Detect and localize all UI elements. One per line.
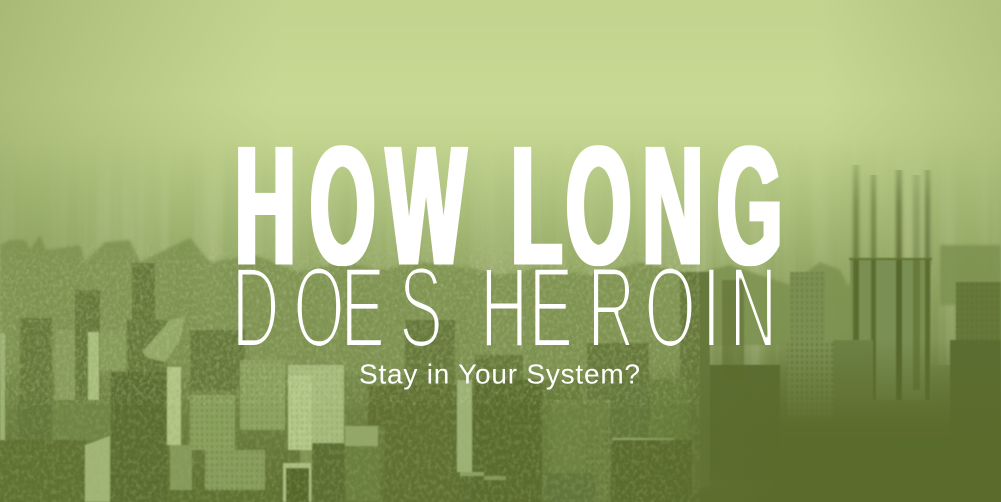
background: motion-blur streaks — [4, 189, 956, 365]
cityscape: light towers left — [0, 316, 185, 463]
cityscape: fine window texture — [0, 235, 700, 502]
cityscape: lower left light blocks — [53, 360, 285, 502]
title: DOES HEROIN: DOES HEROIN — [232, 243, 777, 372]
subtitle: Stay in Your System? — [359, 358, 640, 390]
big building streaks on the right — [853, 165, 930, 265]
cityscape: dark buildings right of centre — [710, 280, 1001, 502]
cityscape: mid block right of tower and centre — [787, 272, 1001, 417]
background: side vignette — [0, 0, 1001, 300]
cityscape: pale central-left building — [283, 365, 378, 502]
cityscape: large tower with stripes, right — [849, 258, 932, 400]
cityscape: dark tower left — [0, 372, 167, 502]
cityscape: bottom-right darkness — [662, 354, 1001, 502]
cityscape: mid dark buildings — [20, 263, 1001, 487]
cityscape: central buildings — [345, 380, 692, 502]
cityscape: far skyline silhouette — [0, 235, 1001, 375]
cityscape: blurred building masses — [0, 235, 1001, 502]
title: HOW LONG: HOW LONG — [235, 113, 782, 300]
